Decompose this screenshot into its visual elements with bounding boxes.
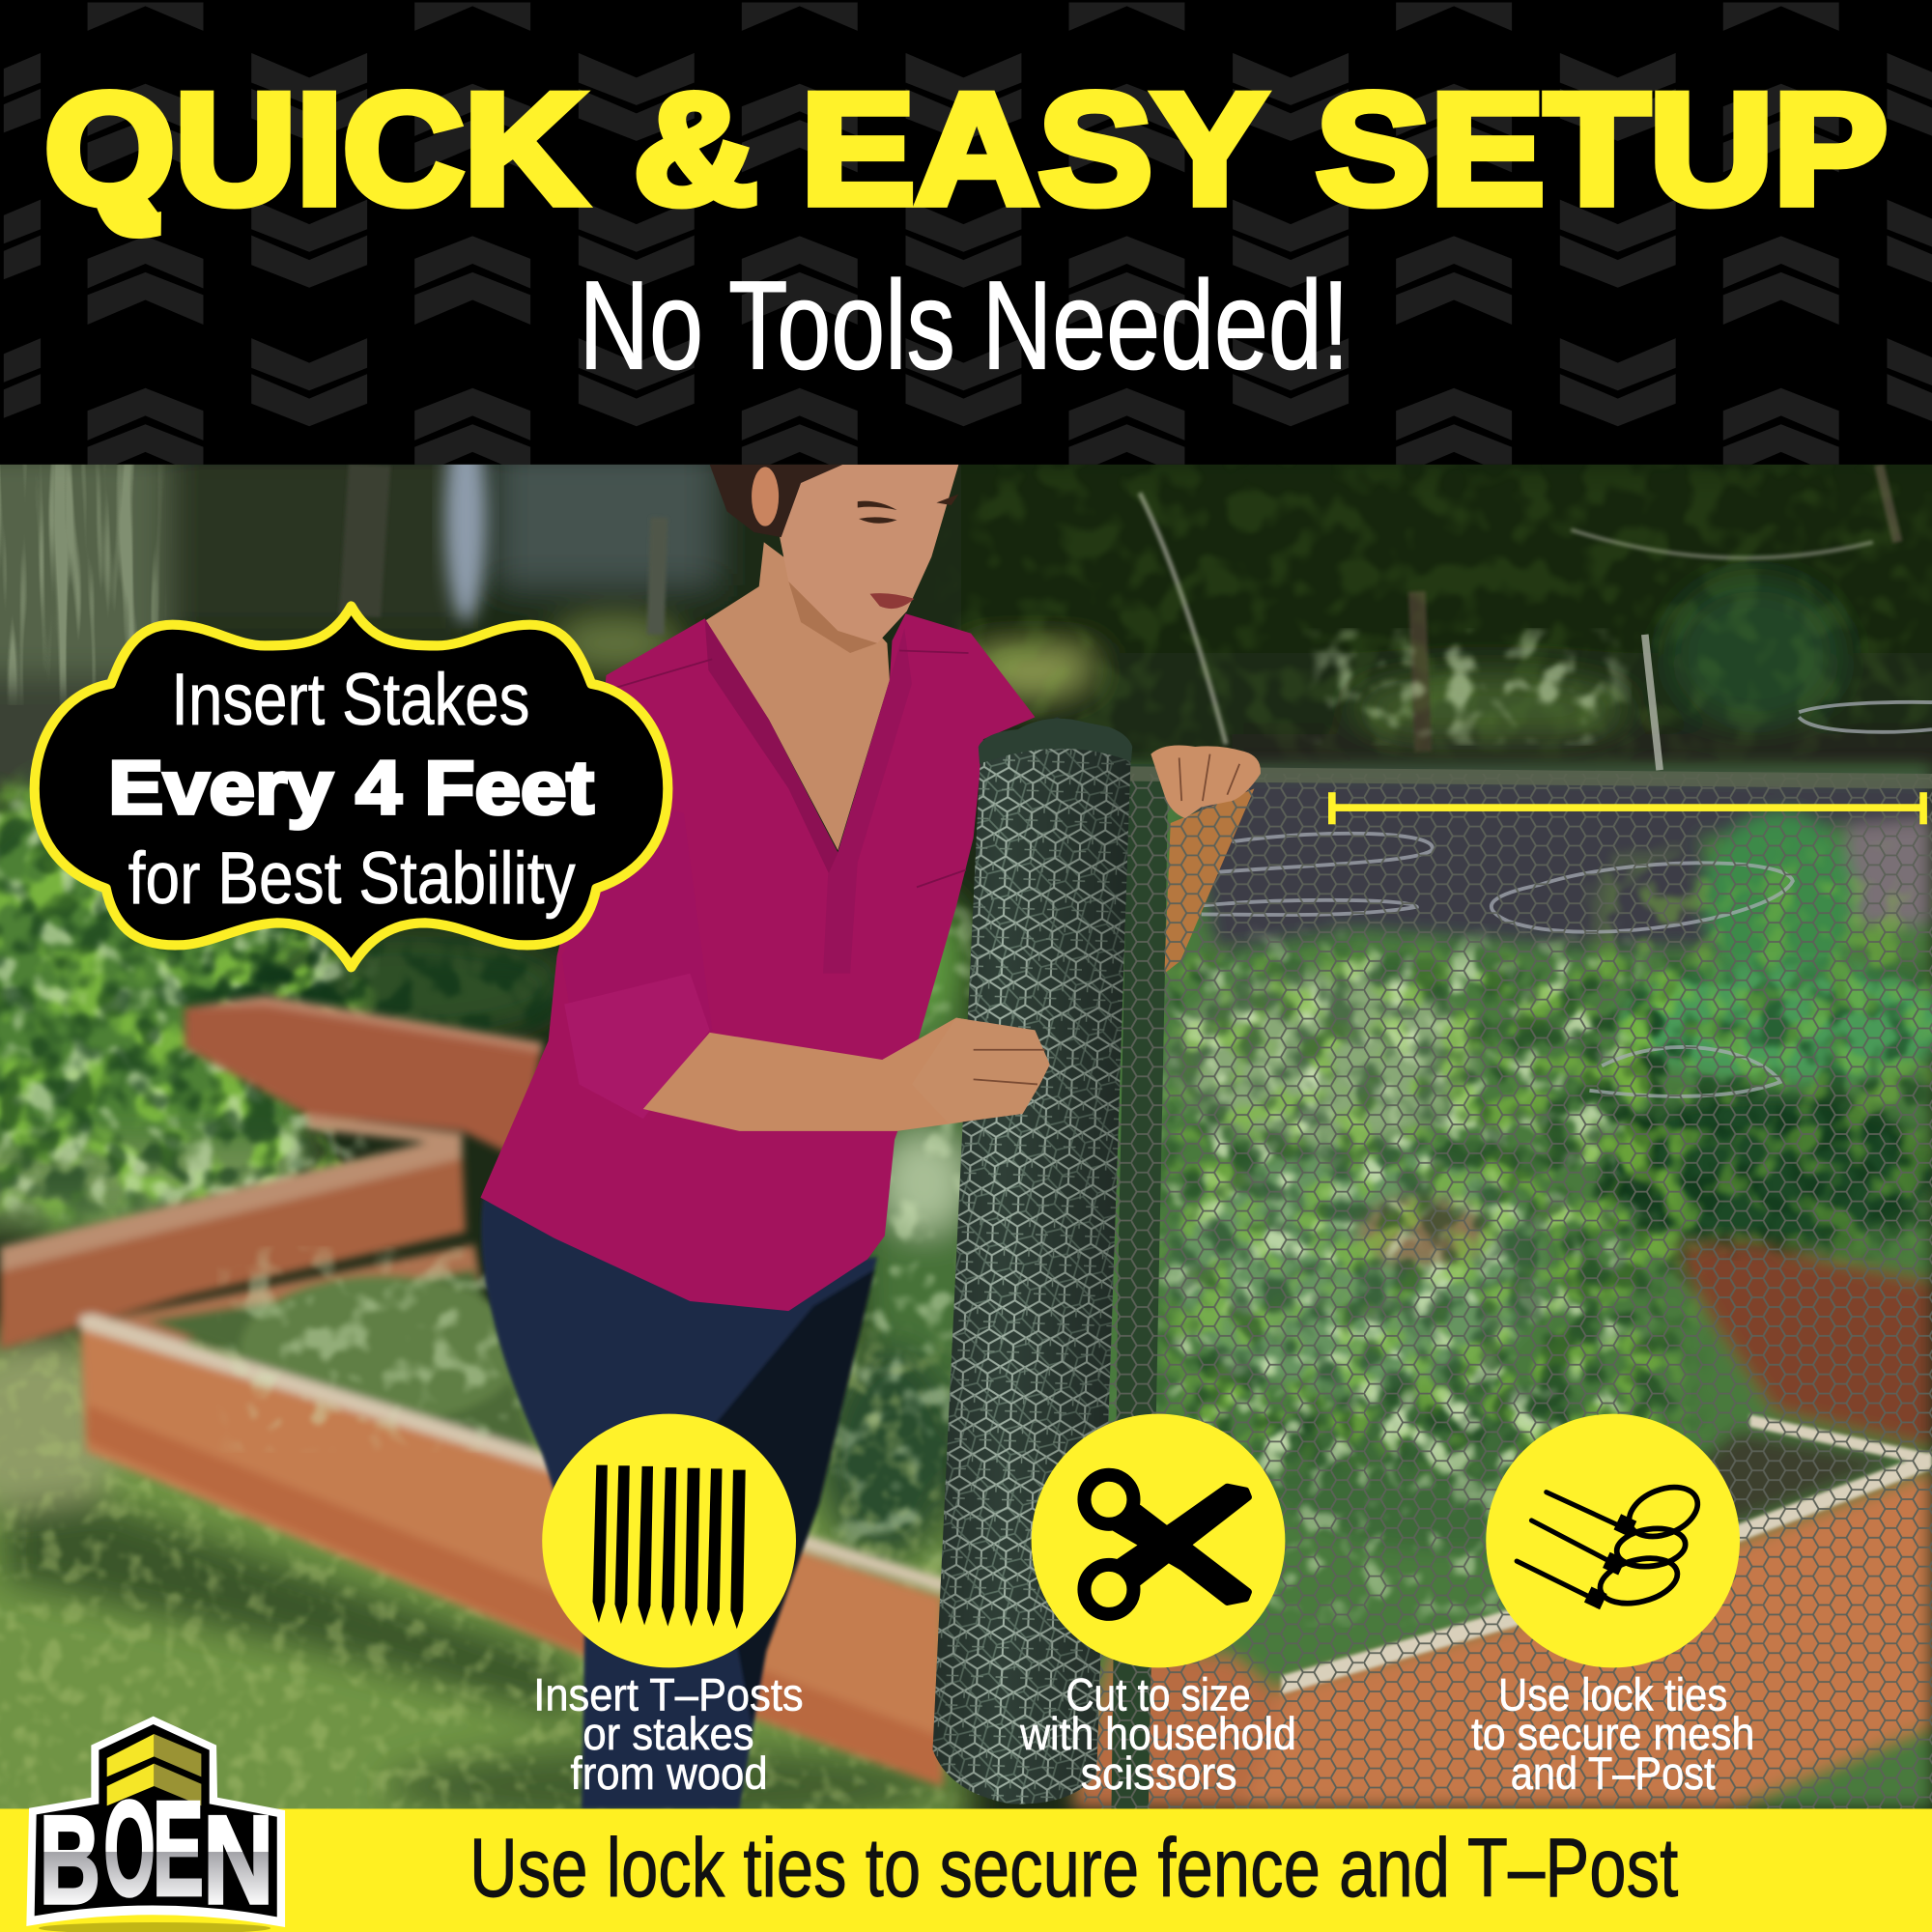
logo: BOEN: O [103, 1773, 156, 1924]
caption: lock ties: to secure mesh [1471, 1709, 1754, 1760]
neck and chest [705, 542, 890, 850]
title: & [634, 60, 757, 237]
ear [752, 467, 779, 526]
logo: BOEN: N [203, 1789, 273, 1930]
blue-grey tree gap [444, 412, 487, 622]
facial features [858, 494, 958, 609]
bed plants detail [234, 1257, 529, 1441]
white bed rim [1282, 1414, 1932, 1694]
garden photo scene [0, 412, 1932, 1861]
caption: lock ties: and T–Post [1511, 1748, 1716, 1800]
woman [480, 465, 1050, 1808]
fence mesh [1084, 766, 1932, 1808]
icon: scissors [1032, 1414, 1285, 1667]
logo: BOEN: B [40, 1789, 100, 1930]
caption: lock ties: Use lock ties [1498, 1669, 1727, 1720]
icon: stakes [542, 1414, 796, 1667]
raised wooden beds [0, 996, 949, 1786]
neck shadow [788, 582, 877, 653]
chicken wire roll [912, 717, 1132, 1804]
face [779, 465, 958, 643]
caption: scissors [1019, 1669, 1296, 1800]
caption: stakes: from wood [571, 1748, 768, 1800]
caption: scissors: Cut to size [1065, 1669, 1251, 1720]
subtitle: No Tools Needed! [579, 254, 1350, 395]
title [44, 60, 1888, 237]
caption: lock ties [1471, 1669, 1754, 1800]
plant texture [1133, 863, 1932, 1614]
icon: cable ties [1486, 1414, 1740, 1667]
header band [0, 0, 1932, 476]
caption: stakes: or stakes [582, 1709, 754, 1760]
caption: stakes [533, 1669, 804, 1800]
fern streaks [0, 443, 160, 690]
photo background [0, 443, 1932, 1861]
tree trunks and stems [359, 465, 1897, 752]
title: EASY [801, 60, 1266, 237]
caption: stakes: Insert T–Posts [533, 1669, 804, 1720]
badge line 1: Insert Stakes [171, 659, 529, 741]
foliage texture [0, 788, 974, 1824]
forearm wedge behind mesh [1164, 788, 1254, 974]
fenced garden behind mesh [1072, 766, 1932, 1808]
badge line 3: for Best Stability [128, 838, 576, 920]
green T-post [1112, 764, 1168, 1808]
caption: scissors: scissors [1081, 1748, 1237, 1800]
width dimension bar [1328, 792, 1927, 824]
title: QUICK [44, 60, 585, 237]
shirt [480, 613, 1035, 1311]
jeans [481, 1198, 877, 1808]
logo: BOEN [26, 1717, 285, 1932]
callout badge [35, 607, 668, 967]
caption: scissors: with household [1019, 1709, 1296, 1760]
logo: BOEN: E [153, 1773, 204, 1924]
forearm and lower hand [643, 1018, 1050, 1131]
title: SETUP [1316, 60, 1888, 237]
wire rings [1202, 635, 1932, 1096]
hair [710, 465, 842, 537]
top foliage texture [961, 465, 1932, 748]
footer bar [0, 1808, 1932, 1932]
badge line 2: Every 4 Feet [108, 747, 594, 830]
hand fingers on roll [912, 1018, 1050, 1123]
hand on fence [1151, 746, 1261, 818]
